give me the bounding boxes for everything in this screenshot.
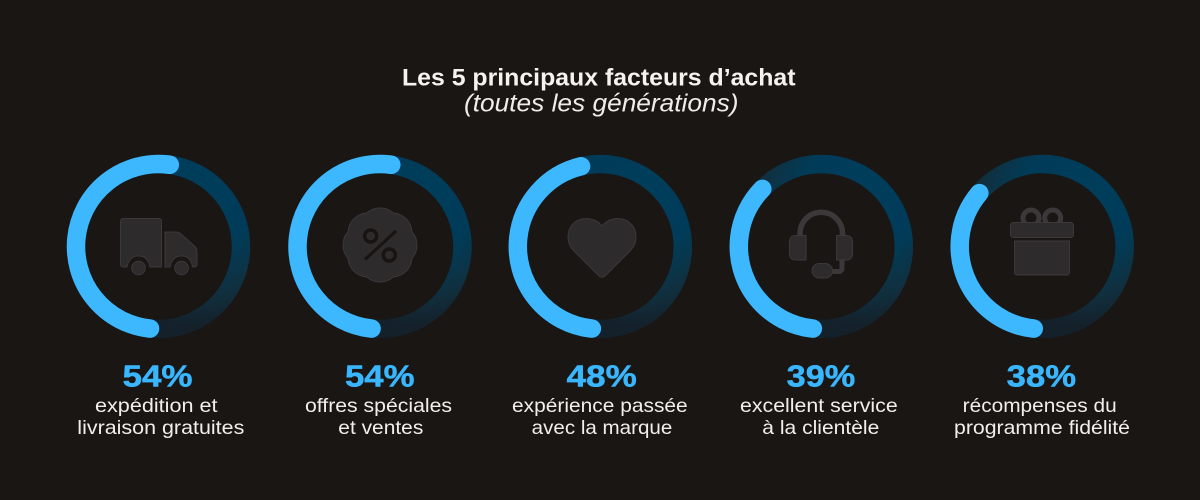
label: expérience passée — [512, 395, 688, 417]
value: 48%: 48% — [567, 358, 637, 394]
donut chart: 54% — [289, 155, 471, 338]
icon: headset — [790, 212, 852, 278]
panel: offres spéciales et ventes — [289, 155, 471, 439]
value: 38%: 38% — [1007, 358, 1076, 394]
panel: excellent service à la clientèle — [730, 155, 912, 439]
value: 39%: 39% — [787, 358, 855, 394]
label: à la clientèle — [762, 417, 879, 439]
label: excellent service — [740, 395, 898, 417]
donut chart: 48% — [509, 155, 691, 338]
label — [77, 395, 245, 439]
value: 54%: 54% — [122, 358, 192, 394]
label: avec la marque — [532, 417, 672, 439]
panel: récompenses du programme fidélité — [951, 155, 1133, 439]
icon: delivery truck — [120, 218, 197, 275]
panel: expérience passée avec la marque — [509, 155, 691, 439]
label: récompenses du — [963, 395, 1117, 417]
label: livraison gratuites — [77, 417, 245, 439]
icon: gift box — [1010, 210, 1074, 275]
donut chart: 54% — [67, 155, 250, 338]
donut chart: 38% — [951, 155, 1133, 338]
title: Les 5 principaux facteurs d’achat — [402, 64, 796, 92]
label — [954, 395, 1130, 439]
panel: expédition et livraison gratuites — [67, 155, 250, 439]
icon: discount badge — [343, 208, 417, 282]
icon: heart — [568, 218, 636, 277]
label: offres spéciales — [305, 395, 452, 417]
title — [402, 64, 796, 118]
value: 54%: 54% — [345, 358, 414, 394]
donut chart: 39% — [730, 155, 912, 338]
label: et ventes — [338, 417, 424, 439]
label — [740, 395, 898, 439]
label: expédition et — [95, 395, 218, 417]
title: (toutes les générations) — [464, 90, 738, 118]
label: programme fidélité — [954, 417, 1130, 439]
label — [512, 395, 688, 439]
label — [305, 395, 452, 439]
